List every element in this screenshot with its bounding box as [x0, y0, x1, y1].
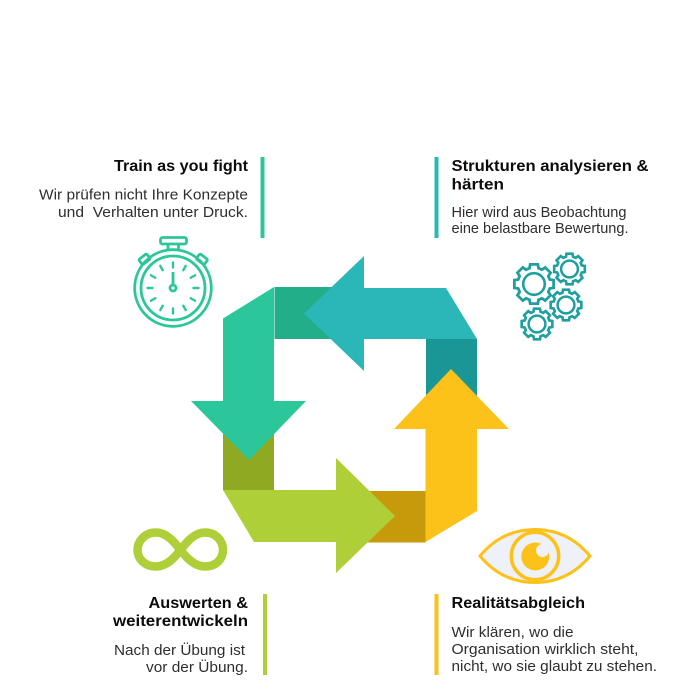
heading: Auswerten und weiterentwickeln: Auswerten & [148, 595, 248, 612]
text block: Konzepte und Verhalten: und Verhalten unter Druck. [58, 205, 248, 221]
accent bar: green [260, 157, 264, 238]
accent bar: teal [434, 157, 438, 238]
connector: dark yellow fold [362, 491, 426, 542]
panel: Strukturen analysieren und härten [434, 157, 648, 238]
arrow: yellow pointing up [394, 369, 509, 542]
text block: Konzepte und Verhalten: Wir prüfen nicht Ihre Konzepte [39, 188, 248, 204]
text block: Nach der Übung: vor der Übung. [146, 658, 248, 676]
heading: Auswerten und weiterentwickeln: weiterentwickeln [112, 613, 248, 630]
panel: Realitätsabgleich [434, 594, 657, 675]
text block: Wir klären: Wir klären, wo die [452, 625, 574, 641]
text block: Wir klären: nicht, wo sie glaubt zu stehen. [452, 659, 657, 675]
heading: Strukturen analysieren und härten: Strukturen analysieren & [452, 158, 648, 175]
text block: Beobachtung und Bewertung: eine belastbare Bewertung. [452, 221, 628, 237]
chart: circular arrow cycle [191, 256, 509, 573]
arrow: green pointing down [191, 287, 306, 460]
heading: Train as you fight: Train as you fight [114, 158, 248, 175]
accent bar: lime [263, 594, 267, 675]
arrow: teal pointing left [304, 256, 477, 371]
text block: Nach der Übung [114, 641, 248, 676]
icon: gears [514, 254, 585, 339]
connector: olive fold [223, 428, 274, 490]
panel: Train as you fight [39, 157, 264, 238]
heading: Strukturen analysieren und härten [452, 158, 648, 194]
text block: Beobachtung und Bewertung: Hier wird aus Beobachtung [452, 205, 626, 221]
heading: Strukturen analysieren und härten: härten [452, 176, 504, 194]
icon: infinity [138, 532, 223, 566]
text block: Wir klären [452, 625, 657, 675]
connector: dark green fold [274, 287, 336, 339]
text block: Nach der Übung: Nach der Übung ist [114, 641, 245, 659]
heading: Realitätsabgleich: Realitätsabgleich [452, 595, 585, 612]
text block: Beobachtung und Bewertung [452, 205, 628, 237]
panel: Auswerten und weiterentwickeln [112, 594, 267, 676]
accent bar: yellow [434, 594, 438, 675]
icon: stopwatch [135, 238, 211, 326]
arrow: lime pointing right [223, 458, 395, 573]
icon: eye [480, 530, 590, 582]
text block: Wir klären: Organisation wirklich steht, [452, 642, 638, 658]
connector: dark teal fold [426, 339, 477, 404]
text block: Konzepte und Verhalten [39, 188, 248, 221]
heading: Auswerten und weiterentwickeln [112, 595, 248, 630]
